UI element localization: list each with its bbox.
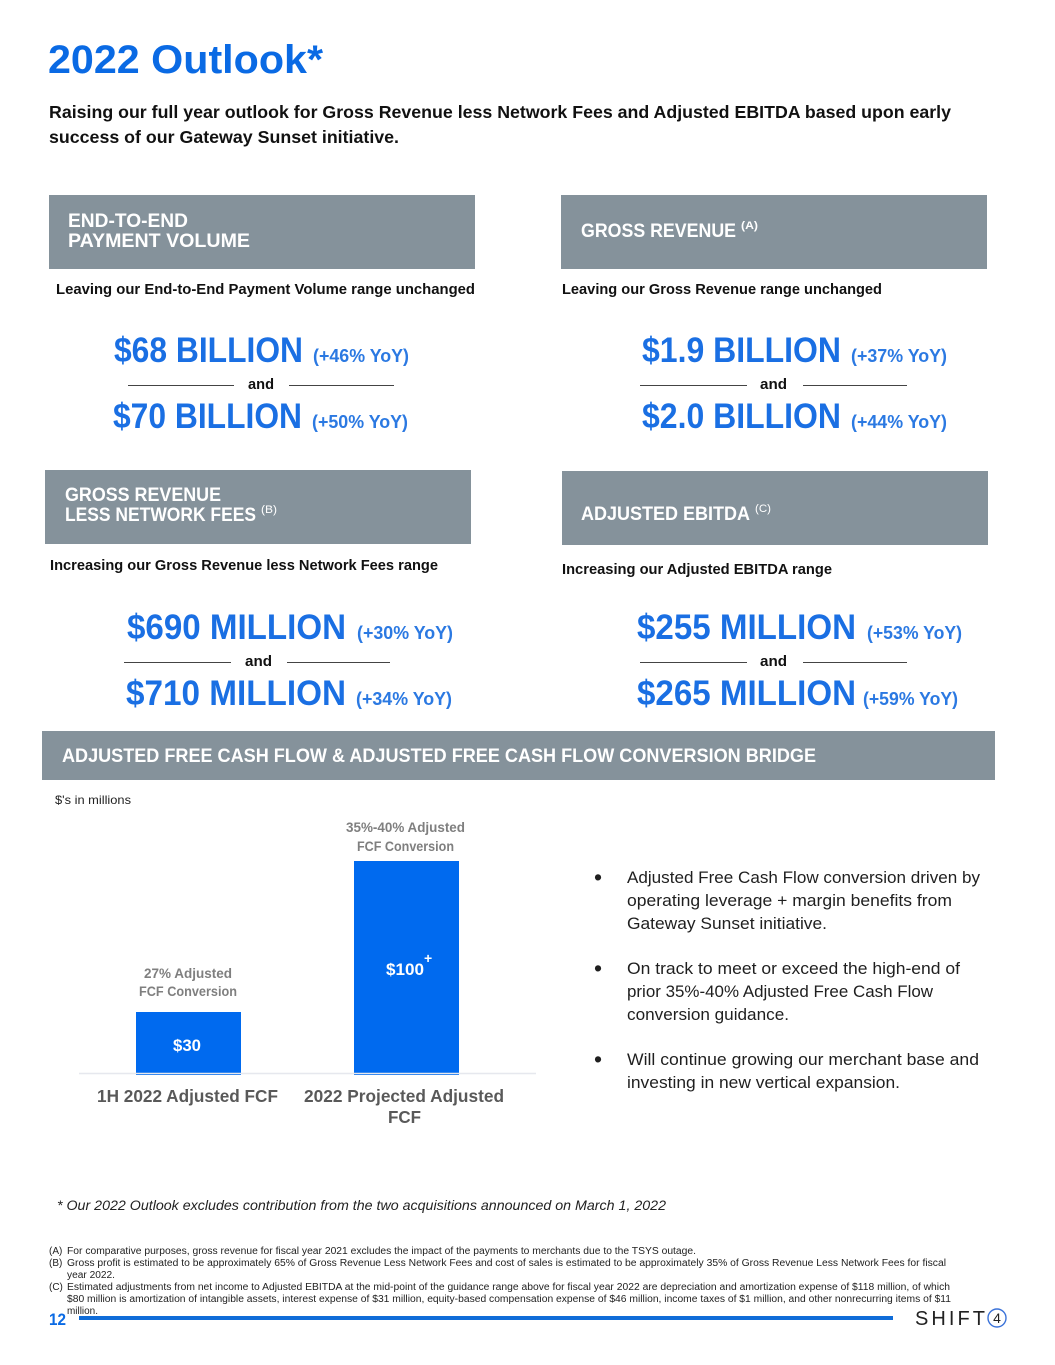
panel: gross revenue less network fees: LESS NETWORK FEES <box>65 505 256 526</box>
bar: 2022 projected: FCF Conversion <box>357 839 454 854</box>
panel: gross revenue: $1.9 BILLION <box>642 331 841 370</box>
footer rule <box>79 1316 893 1320</box>
page number: 12 <box>49 1311 66 1329</box>
panel: gross revenue: GROSS REVENUE <box>581 221 736 242</box>
bar: 2022 projected: $100 <box>386 960 424 979</box>
panel: gross revenue: (+44% YoY) <box>851 412 947 432</box>
panel: end-to-end payment volume: $68 BILLION <box>114 331 303 370</box>
footnotes: (B) <box>49 1258 62 1269</box>
logo: Shift4: SHIFT <box>915 1308 985 1330</box>
footnotes: $80 million is amortization of intangible assets, interest expense of $31 million, equity-based compensation expense of $46 million, income taxes of $1 million, and other nonrecurring items of $11 <box>67 1294 951 1305</box>
panel: end-to-end payment volume: (+46% YoY) <box>313 346 409 366</box>
category labels: 2022 Projected Adjusted <box>304 1086 504 1106</box>
logo: Shift4: 4 <box>993 1310 1001 1326</box>
panel: adjusted EBITDA <box>562 471 988 713</box>
panel: adjusted EBITDA: ADJUSTED EBITDA <box>581 504 750 525</box>
category labels: FCF <box>388 1107 421 1127</box>
bullet list: • <box>594 955 602 981</box>
bar: 1H 2022: $30 <box>173 1036 201 1055</box>
panel: gross revenue: (+37% YoY) <box>851 346 947 366</box>
subtitle: success of our Gateway Sunset initiative. <box>49 127 399 147</box>
bullet list: operating leverage + margin benefits from <box>627 891 952 910</box>
outlook footnote: * Our 2022 Outlook excludes contribution from the two acquisitions announced on March 1, 2022 <box>57 1197 666 1213</box>
unit note: $'s in millions <box>55 793 131 807</box>
footnotes: Gross profit is estimated to be approximately 65% of Gross Revenue Less Network Fees and cost of sales is estimated to be approximately 35% of Gross Revenue Less Network Fees for fiscal <box>67 1258 946 1269</box>
footnotes: (A) <box>49 1246 62 1257</box>
footnotes: (C) <box>49 1282 63 1293</box>
bullet list: conversion guidance. <box>627 1005 789 1024</box>
panel: end-to-end payment volume: and <box>248 376 274 393</box>
panel: end-to-end payment volume: PAYMENT VOLUME <box>68 231 250 252</box>
panel: adjusted EBITDA: (+53% YoY) <box>867 623 962 643</box>
panel: gross revenue less network fees: $710 MILLION <box>126 674 346 713</box>
bullet list: Adjusted Free Cash Flow conversion driven by <box>627 868 980 887</box>
panel: end-to-end payment volume: $70 BILLION <box>113 397 302 436</box>
bullet list: On track to meet or exceed the high-end of <box>627 959 960 978</box>
subtitle: Raising our full year outlook for Gross Revenue less Network Fees and Adjusted EBITDA based upon early <box>49 102 951 122</box>
panel: adjusted EBITDA: Increasing our Adjusted EBITDA range <box>562 561 832 578</box>
panel: end-to-end payment volume: (+50% YoY) <box>312 412 408 432</box>
panel: adjusted EBITDA: and <box>760 653 787 670</box>
category labels: 1H 2022 Adjusted FCF <box>97 1086 278 1106</box>
panel: end-to-end payment volume: Leaving our End-to-End Payment Volume range unchanged <box>56 281 475 298</box>
section band: adjusted free cash flow bridge <box>42 731 995 780</box>
panel: gross revenue: $2.0 BILLION <box>642 397 841 436</box>
section band: adjusted free cash flow bridge: ADJUSTED FREE CASH FLOW & ADJUSTED FREE CASH FLOW CONVERSION BRIDGE <box>62 746 816 767</box>
panel: gross revenue less network fees <box>45 470 471 713</box>
panel: adjusted EBITDA: $265 MILLION <box>637 674 856 713</box>
panel: gross revenue: (A) <box>741 220 758 232</box>
panel: gross revenue less network fees: (+30% YoY) <box>357 623 453 643</box>
category labels <box>97 1086 504 1127</box>
panel: gross revenue: and <box>760 376 787 393</box>
bar: 1H 2022: FCF Conversion <box>139 984 237 999</box>
bar: 2022 projected: 35%-40% Adjusted <box>346 820 465 835</box>
bar: 2022 projected: + <box>424 950 432 966</box>
panel: gross revenue <box>561 195 987 436</box>
panel: gross revenue: Leaving our Gross Revenue range unchanged <box>562 281 882 298</box>
panel: adjusted EBITDA: (C) <box>755 503 771 515</box>
footnotes: Estimated adjustments from net income to Adjusted EBITDA at the mid-point of the guidance range above for fiscal year 2022 are depreciation and amortization expense of $118 million, of which <box>67 1282 950 1293</box>
bullet list: • <box>594 1046 602 1072</box>
panel: end-to-end payment volume <box>49 195 475 436</box>
panel: gross revenue less network fees: GROSS REVENUE <box>65 485 221 506</box>
bullet list: • <box>594 864 602 890</box>
bullet list: Gateway Sunset initiative. <box>627 914 827 933</box>
bar: 2022 projected <box>346 820 465 1075</box>
panel: adjusted EBITDA: (+59% YoY) <box>863 689 958 709</box>
subtitle <box>49 102 951 147</box>
bullet list <box>594 864 980 1092</box>
bar: 1H 2022: 27% Adjusted <box>144 966 232 981</box>
title: 2022 Outlook* <box>48 38 323 82</box>
bar chart <box>79 820 536 1127</box>
panel: gross revenue less network fees: and <box>245 653 272 670</box>
bar: 1H 2022 <box>136 966 241 1075</box>
panel: gross revenue less network fees: (B) <box>261 504 277 516</box>
footnotes: million. <box>67 1306 98 1317</box>
panel: end-to-end payment volume: END-TO-END <box>68 211 188 232</box>
footnotes: year 2022. <box>67 1270 115 1281</box>
panel: gross revenue less network fees: Increasing our Gross Revenue less Network Fees range <box>50 557 438 574</box>
footnotes: For comparative purposes, gross revenue for fiscal year 2021 excludes the impact of the payments to merchants due to the TSYS outage. <box>67 1246 696 1257</box>
panel: gross revenue less network fees: $690 MILLION <box>127 608 346 647</box>
bullet list: Will continue growing our merchant base and <box>627 1050 979 1069</box>
panel: gross revenue less network fees: (+34% YoY) <box>356 689 452 709</box>
panel: adjusted EBITDA: $255 MILLION <box>637 608 856 647</box>
bullet list: investing in new vertical expansion. <box>627 1073 900 1092</box>
bullet list: prior 35%-40% Adjusted Free Cash Flow <box>627 982 934 1001</box>
footnotes <box>49 1246 951 1317</box>
